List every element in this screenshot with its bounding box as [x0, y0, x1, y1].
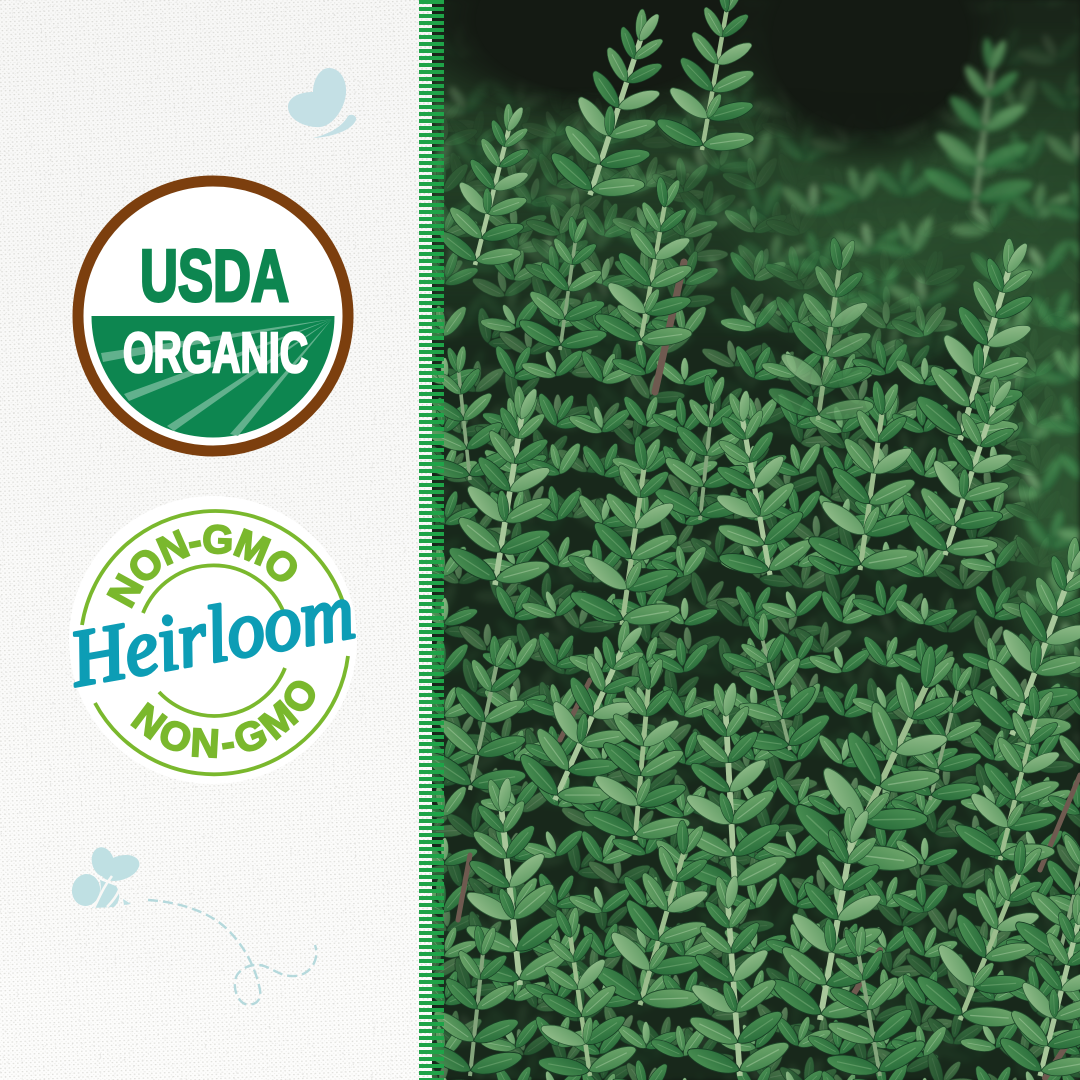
NON-GMO bottom arc text: NON-GMO — [130, 680, 316, 758]
icon: bee — [72, 847, 140, 908]
NON-GMO top arc text: NON-GMO — [106, 524, 298, 609]
dark gaps layer — [432, 108, 1080, 1080]
brown woody stems — [458, 262, 1080, 1078]
badge: Heirloom Non-GMO — [63, 496, 361, 784]
badge: USDA Organic — [72, 176, 354, 456]
icon: butterfly — [288, 68, 356, 138]
photo base dark tone — [432, 0, 1080, 1080]
outer and inner green rings — [82, 511, 348, 774]
decorative green stitched stripe — [419, 0, 444, 1080]
USDA wordmark: USDA — [140, 236, 289, 317]
foreground sprigs — [409, 0, 1080, 1080]
badge field: green half circle — [92, 316, 334, 438]
blurred background foliage — [432, 0, 1080, 1080]
panel: linen fabric background — [0, 0, 432, 1080]
dashed flight path — [148, 898, 318, 1006]
photo: thyme sprigs — [432, 0, 1080, 1080]
sharp dense leaf layers — [432, 0, 1080, 1080]
